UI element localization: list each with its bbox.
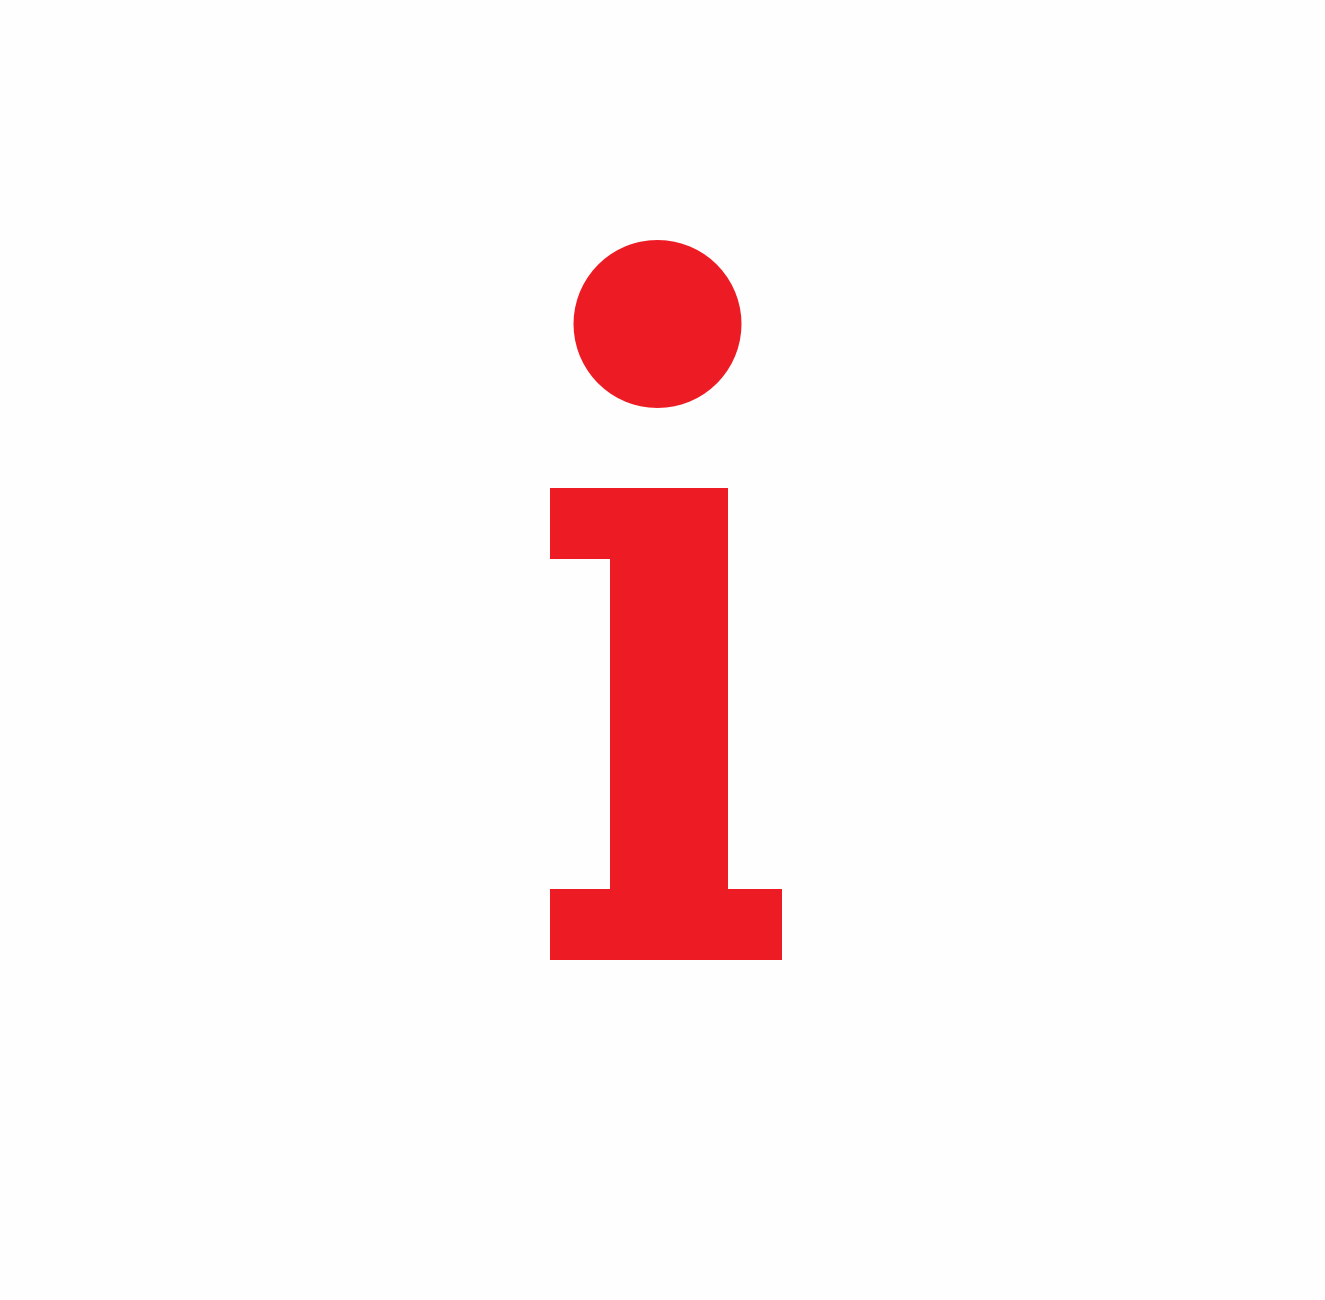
- icon stem with serifs: [550, 488, 782, 960]
- icon: information symbol: [550, 240, 782, 960]
- icon dot: [574, 240, 742, 408]
